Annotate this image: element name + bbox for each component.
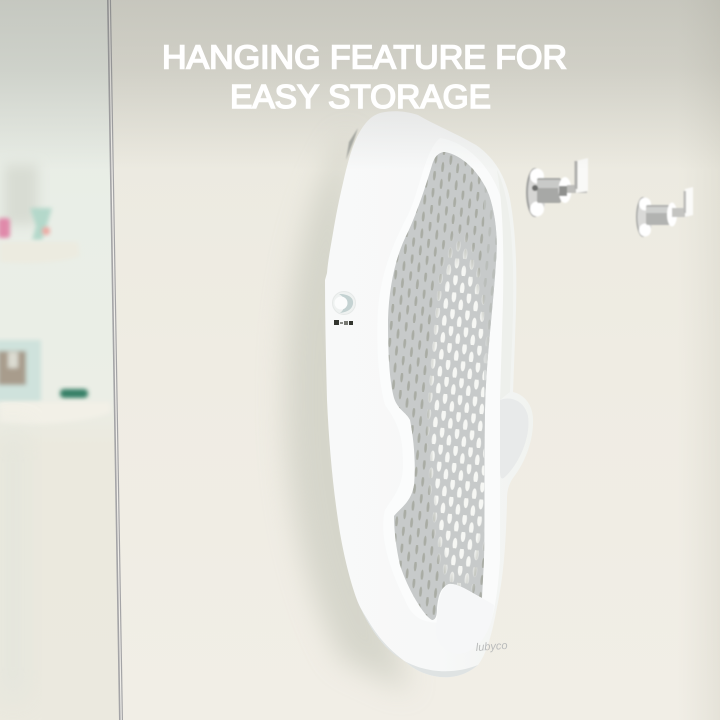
reflection: picture frame (0, 340, 41, 402)
top shade overlay (0, 0, 720, 170)
title line 1: HANGING FEATURE FOR (162, 38, 567, 76)
hook plate (526, 168, 544, 217)
icon: hanging hole (332, 292, 356, 314)
tub: right side soft shading (497, 170, 513, 400)
icon: chrome hook right (636, 187, 693, 237)
tub: inner raised rim highlight (377, 138, 507, 625)
reflection: soft shadow above shelf (4, 165, 38, 225)
reflection: lower shelf (0, 402, 111, 424)
icon: small black symbols (334, 320, 353, 325)
reflection: teal glass (30, 208, 52, 240)
mirror frame edge (107, 0, 123, 720)
reflection: pink object (0, 218, 10, 238)
tub back edge (346, 128, 358, 160)
title line 2: EASY STORAGE (230, 78, 491, 115)
hook collar (558, 177, 572, 203)
tub: outer shell (325, 111, 533, 677)
tub: right handle inner shading (500, 399, 528, 478)
brand mark: lubyco (475, 640, 508, 654)
baby bath tub (325, 111, 533, 677)
hook arm (567, 185, 587, 193)
title (162, 38, 567, 115)
reflection: upper shelf (0, 242, 80, 263)
tub shadow on wall (285, 130, 410, 692)
tub: translucent lower rim (357, 600, 478, 677)
blurred mirror reflection (0, 0, 120, 720)
icon: chrome hook left (526, 158, 588, 217)
tub: gray perforated mesh (388, 152, 497, 620)
tub: lower heel curve (436, 584, 494, 654)
reflection: green object (60, 389, 88, 398)
hook barrel (537, 178, 561, 203)
reflection: coral toy (42, 227, 50, 235)
